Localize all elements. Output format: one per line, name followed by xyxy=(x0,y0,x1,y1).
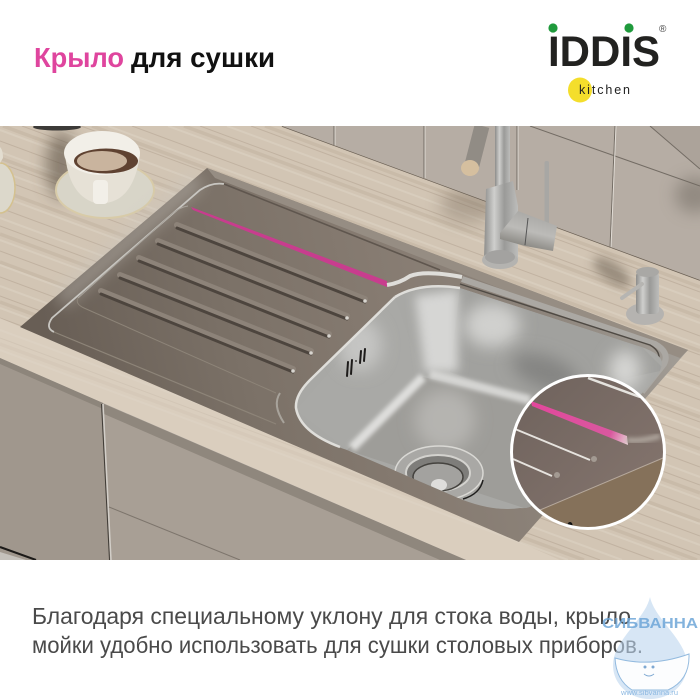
watermark: sibvanna xyxy=(602,597,698,699)
drain strainer xyxy=(395,446,483,500)
faucet xyxy=(461,126,557,269)
zoomed rim line xyxy=(588,378,640,397)
logo: iddis kitchen: kitchen xyxy=(579,83,630,97)
title xyxy=(34,42,275,73)
logo: iddis kitchen: IDDIS xyxy=(548,28,660,76)
description text: Благодаря специальному уклону для стока воды, крыло xyxy=(32,603,631,629)
zoomed pink slope strip xyxy=(531,401,628,445)
drainboard raised lines xyxy=(49,184,440,424)
coffee cup and saucers xyxy=(0,124,154,218)
drying ridges xyxy=(101,225,367,373)
sink plate xyxy=(20,168,688,542)
chrome curl at the end of the pink line xyxy=(387,273,462,285)
sink bowl xyxy=(296,286,665,510)
watermark: sibvanna: СИБВАННА xyxy=(602,615,698,632)
description text xyxy=(32,603,643,658)
logo: iddis kitchen: ® xyxy=(659,24,667,35)
magnifier callout xyxy=(510,374,670,530)
zoomed drying ridges xyxy=(513,429,590,476)
photo: kitchen sink scene xyxy=(0,124,700,560)
watermark: sibvanna: www.sibvanna.ru xyxy=(620,688,678,697)
backsplash wall tiles xyxy=(282,126,700,280)
title: Крыло xyxy=(34,42,124,73)
rear lip of sink xyxy=(462,279,666,392)
soap dispenser xyxy=(622,267,664,325)
cabinets xyxy=(0,358,466,560)
title: для сушки xyxy=(131,42,275,73)
countertop xyxy=(0,126,700,560)
logo: iddis kitchen xyxy=(548,23,667,102)
pink highlight: drying wing slope xyxy=(191,207,387,287)
description text: мойки удобно использовать для сушки столовых приборов. xyxy=(32,632,643,658)
overflow slots xyxy=(347,349,365,376)
